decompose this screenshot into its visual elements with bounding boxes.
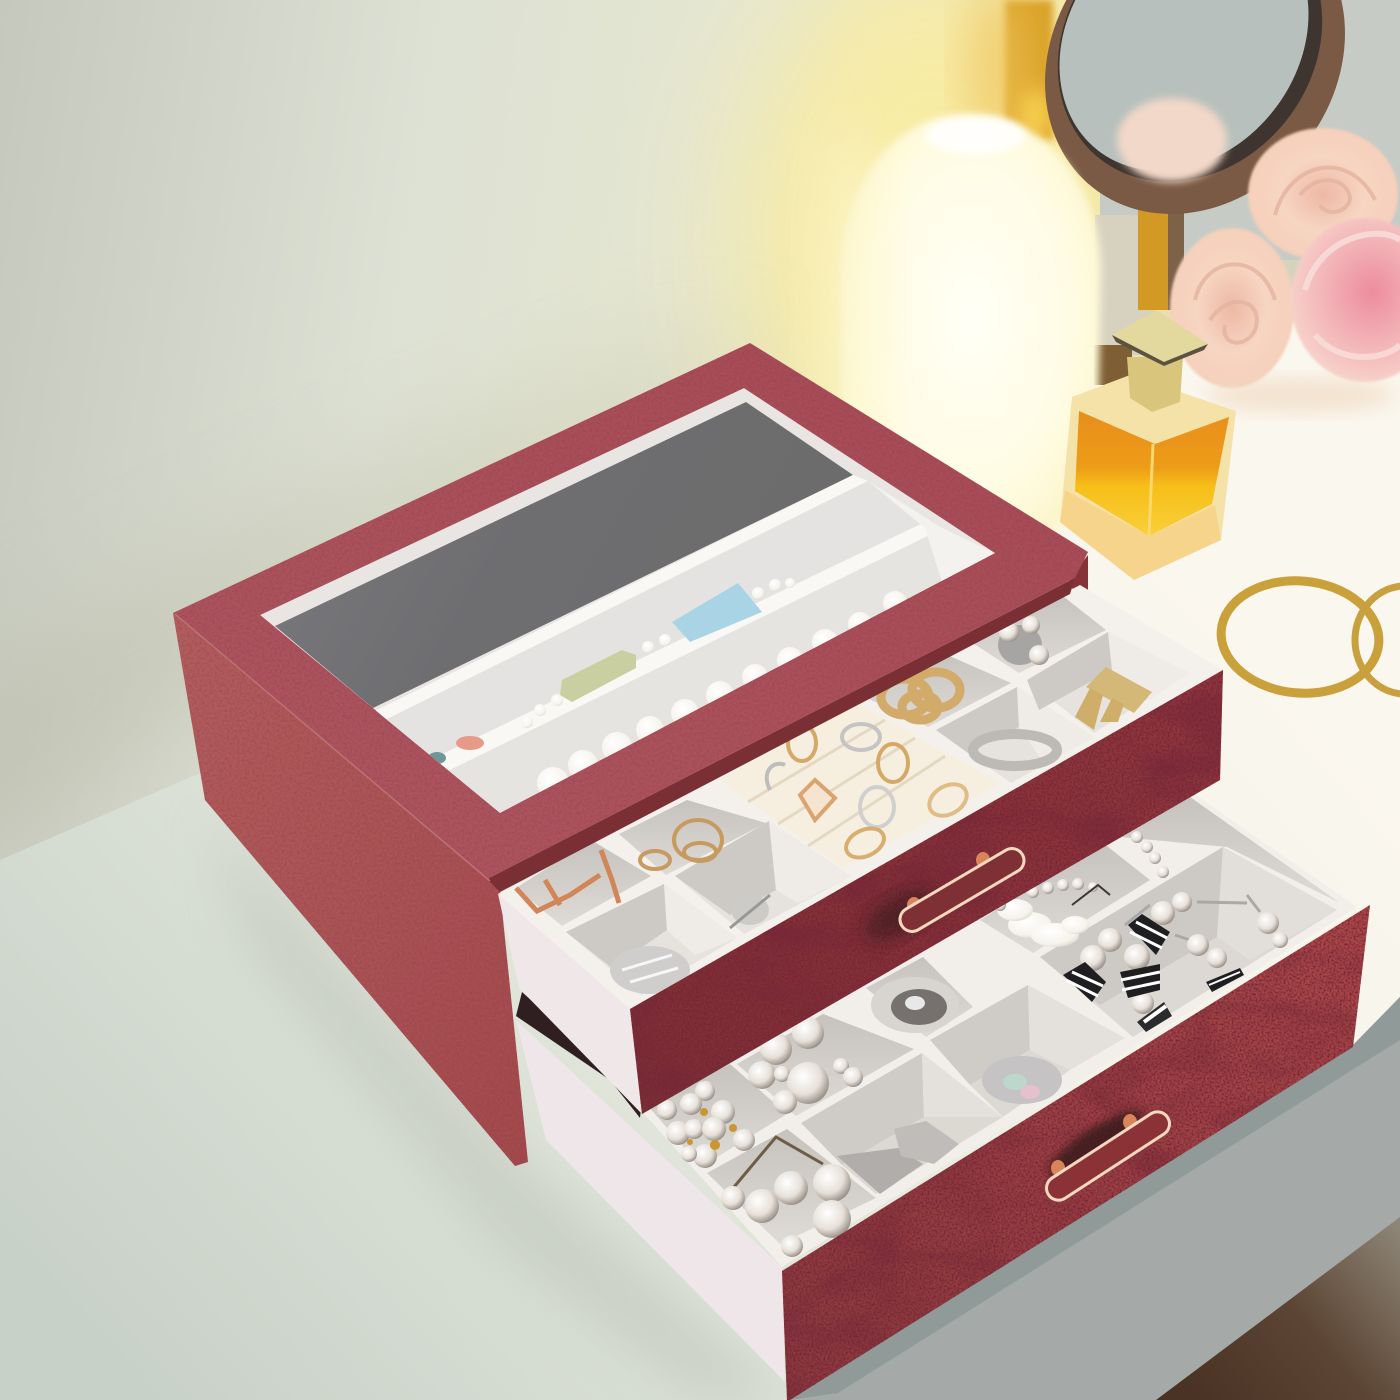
roses [1170, 128, 1400, 411]
crystal stud compartment [675, 821, 851, 934]
bottom drawer front panel [782, 905, 1370, 1400]
top drawer jewelry [516, 616, 1152, 994]
bottom drawer left wall [516, 1020, 785, 1382]
lamp glow and wall shading [0, 0, 1400, 900]
tray divider [434, 522, 940, 772]
rose reflection [1117, 98, 1227, 182]
gold earring compartment [1027, 632, 1189, 733]
box top frame [173, 343, 1088, 879]
top drawer compartments [516, 593, 1106, 926]
bottom drawer handle [1042, 1107, 1174, 1205]
glass window interior [260, 388, 995, 813]
bottle cap [1112, 310, 1208, 362]
silver necklace [982, 1056, 1062, 1104]
bottle glass [1060, 375, 1236, 580]
tray end wall [870, 482, 995, 581]
top drawer floor [498, 585, 1223, 1009]
box shadow on table [205, 810, 790, 1400]
crystal stud [730, 895, 770, 928]
mirror stand [1138, 200, 1170, 310]
pearl cluster upper [748, 1017, 863, 1114]
mirror inside lid [275, 402, 853, 708]
chunky gold rings [881, 672, 960, 720]
top drawer [498, 585, 1223, 1114]
frame seam stitch [175, 614, 490, 881]
bottle neck [1127, 357, 1183, 412]
silver ring compartment [936, 687, 1094, 783]
handle pill [896, 844, 1028, 936]
perfume liquid [1075, 411, 1229, 536]
top drawer front panel [630, 670, 1223, 1114]
mirror on gold stand [983, 0, 1400, 385]
perfume bottle [1060, 310, 1236, 580]
pearl earrings [721, 1137, 851, 1257]
striped bead hoop earrings [1063, 892, 1288, 1032]
coral and teal beads [456, 736, 484, 750]
rhinestone earrings [837, 1121, 959, 1194]
gold rectangle earrings [1075, 667, 1152, 730]
pearl cluster left [657, 1081, 755, 1168]
ring roll compartment [719, 703, 1000, 868]
bottom drawer jewelry [657, 831, 1288, 1257]
floor beyond table [1100, 1180, 1400, 1400]
table front edge [790, 997, 1400, 1400]
mirror glass [1008, 0, 1360, 221]
blue stone [672, 583, 762, 642]
rhinestone compartment [801, 1053, 1003, 1194]
striped earring compartment [1040, 847, 1337, 1037]
bottom drawer gap shadow [516, 992, 642, 1118]
mirror frame [983, 0, 1400, 274]
top drawer handle [896, 844, 1028, 936]
shell and pearl bracelet [997, 899, 1089, 947]
jewelry box [173, 343, 1370, 1400]
silver band ring [973, 734, 1057, 766]
necklace compartment [930, 985, 1125, 1117]
tray back wall [375, 475, 868, 722]
right corner post [1067, 555, 1088, 593]
bottle base [1060, 490, 1221, 580]
bottom drawer compartments [648, 797, 1340, 1244]
bottom drawer [516, 793, 1370, 1400]
lower strand pearls [537, 591, 907, 799]
upper strand pearls [521, 578, 795, 728]
box left side [173, 613, 528, 1166]
silver earring compartment [566, 884, 737, 995]
silver leaf earring [610, 946, 690, 994]
handle pegs [976, 852, 990, 868]
bottom drawer floor [637, 793, 1357, 1267]
lamp top highlight [925, 117, 1025, 153]
rose gold chain [516, 850, 619, 911]
lower tray slot [446, 530, 995, 813]
handle pill [1042, 1107, 1174, 1205]
top drawer left wall [498, 894, 642, 1114]
gold spiral earrings [640, 820, 722, 869]
handle pegs [1123, 1114, 1137, 1130]
silver earring [871, 977, 959, 1033]
window base [260, 388, 995, 813]
lamp soft left glow [820, 130, 880, 470]
rings on roll [767, 724, 972, 863]
pearl cluster earrings [998, 616, 1049, 665]
tray gems and pearls [428, 578, 907, 799]
bottom drawer dark wear [1041, 1101, 1149, 1185]
lid shadow lip [487, 578, 1075, 892]
gold bangles [1216, 574, 1400, 700]
green stone [560, 650, 636, 702]
top drawer dark wear [856, 879, 944, 951]
lamp [842, 114, 1101, 560]
upper tray slot [386, 720, 435, 760]
rose shadow on table [1205, 379, 1395, 411]
